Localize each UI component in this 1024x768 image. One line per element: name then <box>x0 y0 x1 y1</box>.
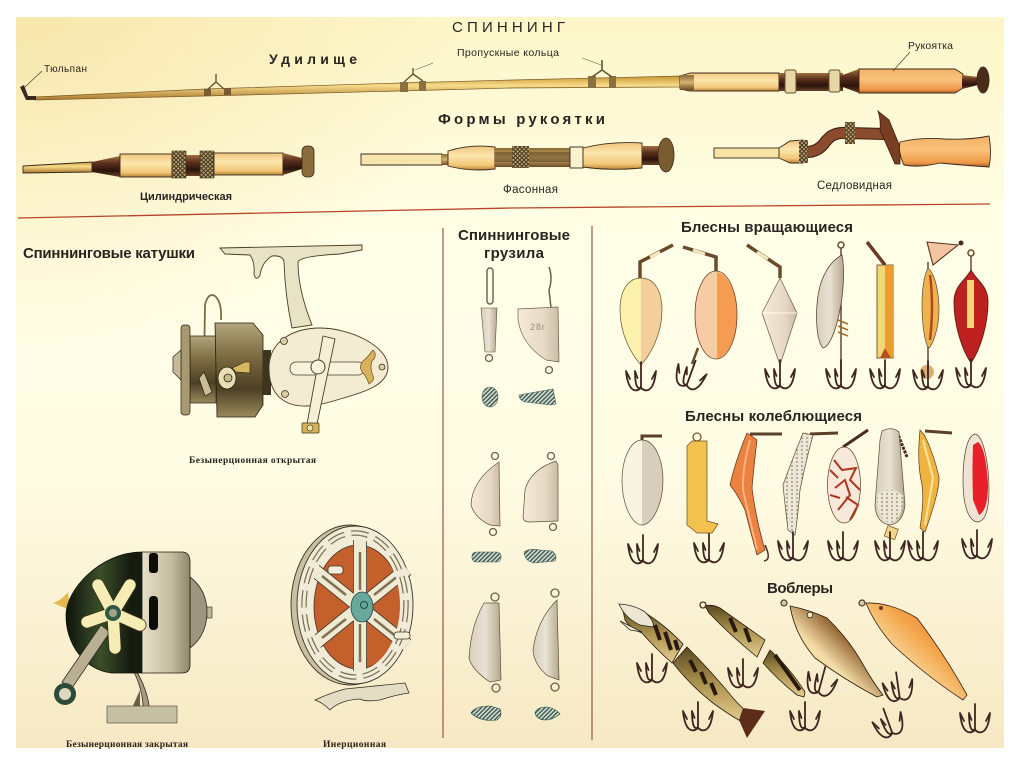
spoon seven <box>908 430 952 560</box>
sinker one section <box>482 387 498 407</box>
sinker one body <box>481 268 497 362</box>
rear body <box>763 650 805 697</box>
label: guide rings: Пропускные кольца <box>457 47 559 59</box>
handle: saddle <box>714 111 990 167</box>
crank handles <box>290 336 375 433</box>
cone tip <box>53 592 70 610</box>
spoon one <box>622 436 663 563</box>
heading: wobbling spoons: Блесны колеблющиеся <box>685 408 862 425</box>
head <box>619 604 653 632</box>
rod illustration <box>20 60 680 100</box>
stripes <box>655 625 678 650</box>
rod handle <box>680 66 990 94</box>
front body <box>705 605 765 657</box>
bail wire <box>204 295 221 372</box>
label: tulip: Тюльпан <box>44 64 87 75</box>
spoon five <box>828 430 868 560</box>
front segment <box>622 606 683 663</box>
sinker set two <box>471 452 558 563</box>
sinker five body <box>469 593 501 692</box>
guide ring two <box>400 68 426 92</box>
reel foot <box>107 672 177 723</box>
reel: fly reel <box>291 525 413 710</box>
spinner one <box>620 245 673 390</box>
spinner five <box>867 242 900 388</box>
spinner six <box>913 240 964 389</box>
sinker three body <box>471 452 500 536</box>
rear segment <box>673 647 745 722</box>
reel handles <box>328 566 410 639</box>
handle: shaped <box>361 138 674 172</box>
knob center <box>105 605 121 621</box>
wobbler three <box>781 600 907 740</box>
sinker six section <box>535 707 560 720</box>
title: СПИННИНГ <box>452 19 565 36</box>
sinker set one <box>481 267 559 407</box>
rim front <box>297 526 413 684</box>
teal hub <box>351 592 373 622</box>
label: tulip <box>25 64 87 87</box>
label: handle: Рукоятка <box>908 40 953 52</box>
sinker four section <box>524 549 556 563</box>
spinner four <box>816 242 856 388</box>
spoon four <box>778 433 838 560</box>
heading: reels: Спиннинговые катушки <box>23 245 195 262</box>
crank arm <box>54 625 110 705</box>
caption: fly reel: Инерционная <box>323 740 386 750</box>
reel: closed face <box>53 552 212 723</box>
spool <box>173 325 216 415</box>
heading: sinkers <box>458 227 570 262</box>
sinker five section <box>471 706 501 720</box>
grey body <box>142 552 190 673</box>
label: guide rings <box>415 47 601 70</box>
spinner two <box>672 247 737 392</box>
label: handle <box>893 40 953 71</box>
guide ring three <box>588 60 616 88</box>
heading: rod: Удилище <box>269 51 357 67</box>
divider vertical two <box>591 226 593 740</box>
caption: saddle: Седловидная <box>817 180 892 192</box>
spoon two <box>687 433 724 562</box>
handle: cylindrical <box>23 146 314 178</box>
dome <box>190 577 207 648</box>
reel base <box>315 683 409 710</box>
heading: wobblers: Воблеры <box>767 580 833 597</box>
wobbler four <box>859 600 990 732</box>
caption: open reel: Безынерционная открытая <box>189 456 316 466</box>
sinker two section <box>519 389 556 405</box>
plate screws <box>280 338 385 398</box>
heading: spinners: Блесны вращающиеся <box>681 219 853 236</box>
divider vertical one <box>442 228 444 738</box>
tail <box>739 708 765 738</box>
guide ring one <box>204 74 231 96</box>
side plate <box>269 328 388 406</box>
dark body <box>66 552 142 673</box>
rim ring <box>304 533 406 677</box>
drum <box>215 323 263 417</box>
caption: shaped: Фасонная <box>503 184 558 196</box>
caption: cylindrical: Цилиндрическая <box>140 191 232 203</box>
sinker six body <box>533 589 559 691</box>
heading: handle forms: Формы рукоятки <box>438 111 605 128</box>
divider horizontal <box>18 204 990 218</box>
sinker three section <box>472 552 501 562</box>
sinker set three <box>469 589 560 720</box>
bail arm <box>199 362 250 396</box>
spoon six <box>875 429 907 560</box>
rim slots <box>304 533 406 677</box>
spinner seven <box>954 250 988 387</box>
wobbler two <box>700 602 820 730</box>
foot and stem <box>220 245 362 328</box>
caption: closed reel: Безынерционная закрытая <box>66 740 188 750</box>
spokes <box>313 540 407 674</box>
heading: sinkers: Спиннинговые <box>458 227 570 244</box>
wobbler one <box>619 604 765 738</box>
reel: open face <box>173 245 388 433</box>
tip guide <box>20 85 36 100</box>
rim back <box>291 525 409 685</box>
star knob <box>87 585 140 648</box>
spinner three <box>747 245 797 388</box>
spoon three <box>730 433 782 561</box>
spoon eight <box>962 434 992 558</box>
heading: sinkers: грузила <box>484 245 545 262</box>
sinker four body <box>523 452 558 530</box>
sinker two body: 28г <box>530 322 546 332</box>
slots <box>149 553 158 630</box>
orange sectors <box>314 545 402 669</box>
